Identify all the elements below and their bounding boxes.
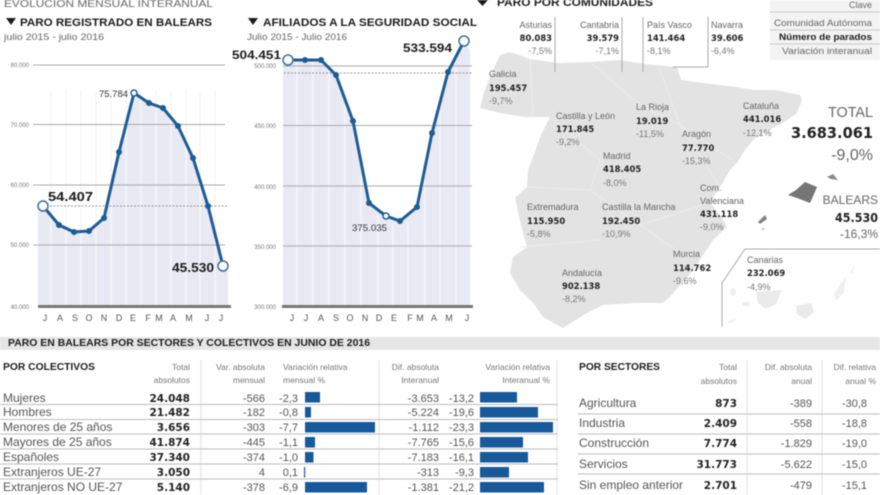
table header: Dif. absoluta bbox=[392, 362, 439, 372]
row: Mujeres: -2,3 bbox=[279, 393, 298, 405]
row: Agricultura: -389 bbox=[790, 398, 812, 410]
row: Construcción: -19,0 bbox=[842, 438, 867, 450]
axis labels bbox=[11, 63, 30, 311]
month labels bbox=[43, 313, 223, 323]
map key bbox=[770, 0, 880, 60]
month labels: M bbox=[185, 313, 193, 323]
region: Madrid: -8,0% bbox=[603, 178, 627, 188]
Baleares total: -16,3% bbox=[840, 227, 878, 241]
axis labels: 300.000 bbox=[254, 305, 277, 311]
region: Castilla la Mancha: Castilla la Mancha bbox=[602, 202, 676, 212]
region: Cantabria: 39.579 bbox=[587, 33, 619, 43]
table header: POR COLECTIVOS bbox=[3, 362, 95, 373]
region: Cataluña bbox=[743, 101, 781, 138]
region: Extremadura: -5,8% bbox=[527, 229, 551, 239]
row: Extranjeros NO UE-27: -21,2 bbox=[449, 482, 474, 494]
table header: Variación relativa bbox=[283, 362, 348, 372]
row: Extranjeros UE-27: -313 bbox=[417, 467, 439, 479]
table header bbox=[579, 362, 876, 386]
heading: afiliados: AFILIADOS A LA SEGURIDAD SOCIAL bbox=[263, 17, 477, 29]
axis labels: 350.000 bbox=[254, 245, 277, 251]
row: Hombres bbox=[3, 405, 538, 419]
row: Mujeres: Mujeres bbox=[3, 391, 46, 405]
subtitle: period: julio 2015 - julio 2016 bbox=[3, 32, 104, 42]
region: Madrid: Madrid bbox=[603, 151, 631, 161]
regional borders bbox=[520, 59, 737, 260]
map key: Número de parados bbox=[779, 32, 872, 42]
row: Servicios: Servicios bbox=[579, 457, 628, 471]
region: Castilla y León: 171.845 bbox=[556, 124, 594, 134]
region: La Rioja: -11,5% bbox=[636, 129, 664, 139]
region: Murcia: Murcia bbox=[673, 249, 700, 259]
map key: Clave bbox=[849, 0, 872, 10]
region: Extremadura bbox=[527, 202, 579, 239]
row: Construcción: Construcción bbox=[579, 436, 649, 450]
region: Asturias bbox=[519, 20, 552, 56]
row: Hombres: -0,8 bbox=[279, 407, 298, 419]
row: Mayores de 25 años: 41.874 bbox=[149, 437, 190, 449]
table header: mensual % bbox=[283, 375, 325, 385]
month labels: M bbox=[155, 313, 163, 323]
region: Comunidad Valenciana: -9,0% bbox=[700, 222, 724, 232]
region: Andalucía: Andalucía bbox=[562, 268, 602, 278]
subtitle: period: Julio 2015 - Julio 2016 bbox=[247, 32, 347, 42]
row: Sin empleo anterior: -15,1 bbox=[842, 480, 867, 492]
value callouts: 375.035 bbox=[352, 223, 387, 234]
region: Madrid bbox=[603, 151, 641, 188]
value callouts: 54.407 bbox=[48, 189, 93, 204]
row: Mayores de 25 años: -445 bbox=[243, 437, 265, 449]
row: Mayores de 25 años: Mayores de 25 años bbox=[3, 435, 112, 449]
axis labels: 500.000 bbox=[254, 64, 277, 70]
region: Aragón bbox=[682, 129, 714, 166]
axis labels: 50.000 bbox=[11, 243, 30, 249]
region: Asturias: 80.083 bbox=[520, 33, 552, 43]
month labels: N bbox=[362, 313, 368, 323]
month labels: J bbox=[290, 313, 294, 323]
region: Cantabria bbox=[580, 20, 619, 56]
region: Murcia bbox=[673, 249, 711, 286]
region: Castilla la Mancha bbox=[602, 202, 676, 239]
table header: absolutos bbox=[154, 375, 190, 385]
map key: Comunidad Autónoma bbox=[774, 18, 872, 28]
panel: paro registrado chart bbox=[3, 17, 231, 323]
region: Aragón: -15,3% bbox=[682, 156, 711, 166]
section heading band: sectores y colectivos: PARO EN BALEARS POR SECTORES Y COLECTIVOS EN JUNIO DE 2016 bbox=[8, 338, 370, 349]
area under line bbox=[38, 93, 228, 306]
month labels: J bbox=[465, 313, 469, 323]
line series bbox=[38, 90, 228, 271]
row: Extranjeros UE-27: -9,3 bbox=[455, 467, 474, 479]
value callouts: 75.784 bbox=[99, 89, 128, 100]
month labels: A bbox=[318, 313, 324, 323]
row: Industria: -558 bbox=[790, 418, 812, 430]
national total: -9,0% bbox=[831, 147, 873, 164]
region: Asturias: Asturias bbox=[519, 20, 552, 30]
region: Comunidad Valenciana: Com. bbox=[700, 183, 722, 193]
month labels: O bbox=[346, 313, 354, 323]
Baleares total bbox=[823, 193, 878, 241]
row: Menores de 25 años: -303 bbox=[243, 422, 265, 434]
table header: Total bbox=[172, 362, 190, 372]
row: Agricultura: -30,8 bbox=[842, 398, 867, 410]
month labels: D bbox=[376, 313, 383, 323]
map of Spain bbox=[480, 52, 802, 328]
row: Extranjeros NO UE-27: -378 bbox=[243, 482, 265, 494]
connector lines bbox=[555, 17, 708, 72]
table header: Var. absoluta bbox=[216, 362, 265, 372]
row: Menores de 25 años bbox=[3, 420, 553, 434]
heading: paro registrado: PARO REGISTRADO EN BALEARS bbox=[20, 17, 212, 29]
Baleares total: 45.530 bbox=[835, 211, 878, 225]
line series bbox=[283, 36, 469, 224]
region: País Vasco: País Vasco bbox=[647, 20, 692, 30]
row: Mujeres: 24.048 bbox=[149, 393, 190, 405]
region: Galicia: Galicia bbox=[489, 69, 517, 79]
month labels: S bbox=[72, 313, 78, 323]
region: Canarias bbox=[747, 255, 785, 292]
row: Sin empleo anterior bbox=[579, 478, 867, 492]
section heading band: sectores y colectivos bbox=[0, 337, 880, 350]
region: País Vasco: -8,1% bbox=[647, 46, 671, 56]
month labels: S bbox=[333, 313, 339, 323]
axis labels: 80.000 bbox=[11, 63, 30, 69]
region: Cataluña: Cataluña bbox=[743, 101, 779, 111]
row: Menores de 25 años: -7,7 bbox=[279, 422, 298, 434]
region: Asturias: -7,5% bbox=[528, 46, 552, 56]
month labels: J bbox=[205, 313, 209, 323]
month labels: M bbox=[445, 313, 453, 323]
region: Murcia: -9,6% bbox=[673, 276, 697, 286]
axis labels: 70.000 bbox=[11, 123, 30, 129]
table header: Total bbox=[719, 362, 737, 372]
row: Españoles: -7.183 bbox=[408, 452, 439, 464]
row: Extranjeros UE-27: 3.050 bbox=[157, 467, 190, 479]
table header: absolutos bbox=[701, 376, 737, 386]
panel: afiliados chart bbox=[232, 17, 477, 323]
month labels: F bbox=[407, 313, 413, 323]
row: Menores de 25 años: -23,3 bbox=[449, 422, 474, 434]
Canary islands bbox=[726, 266, 855, 323]
table header: anual % bbox=[845, 376, 876, 386]
row: Extranjeros UE-27 bbox=[3, 465, 509, 479]
table header: mensual bbox=[233, 375, 265, 385]
region: Andalucía bbox=[562, 268, 602, 304]
row: Industria bbox=[579, 416, 867, 430]
Balearic islands bbox=[758, 174, 838, 230]
table: por colectivos bbox=[0, 360, 558, 495]
row: Servicios: 31.773 bbox=[696, 459, 737, 471]
region: La Rioja bbox=[636, 102, 669, 139]
month labels: J bbox=[43, 313, 47, 323]
Baleares total: BALEARS bbox=[823, 193, 878, 207]
region: Andalucía: -8,2% bbox=[562, 294, 586, 304]
axis labels: 40.000 bbox=[11, 305, 30, 311]
row: Servicios: -15,0 bbox=[842, 459, 867, 471]
table header bbox=[3, 362, 550, 385]
region: Comunidad Valenciana: Valenciana bbox=[700, 196, 744, 206]
month labels: J bbox=[304, 313, 308, 323]
row: Menores de 25 años: -1.112 bbox=[409, 422, 439, 434]
row: Menores de 25 años: Menores de 25 años bbox=[3, 420, 112, 434]
row: Construcción: 7.774 bbox=[704, 438, 737, 450]
area under line bbox=[283, 41, 470, 306]
month labels: A bbox=[170, 313, 176, 323]
row: Mujeres: -13,2 bbox=[449, 393, 474, 405]
region: Aragón: 77.770 bbox=[682, 143, 714, 153]
row: Hombres: -19,6 bbox=[449, 407, 474, 419]
row: Sin empleo anterior: -479 bbox=[790, 480, 812, 492]
row: Españoles: Españoles bbox=[3, 450, 59, 464]
row: Extranjeros NO UE-27: -1.381 bbox=[408, 482, 439, 494]
region: La Rioja: 19.019 bbox=[636, 116, 668, 126]
row: Hombres: -5.224 bbox=[408, 407, 439, 419]
region: Galicia: 195.457 bbox=[489, 83, 527, 93]
row: Españoles bbox=[3, 450, 528, 464]
row: Industria: 2.409 bbox=[704, 418, 737, 430]
row: Hombres: Hombres bbox=[3, 405, 52, 419]
row: Mayores de 25 años: -7.765 bbox=[408, 437, 439, 449]
row: Agricultura: 873 bbox=[715, 398, 737, 410]
table header: Variación relativa bbox=[485, 362, 550, 372]
row: Mayores de 25 años: -15,6 bbox=[449, 437, 474, 449]
month labels: A bbox=[431, 313, 437, 323]
region: Galicia: -9,7% bbox=[489, 96, 513, 106]
month labels: A bbox=[57, 313, 63, 323]
row: Mujeres: -566 bbox=[243, 393, 265, 405]
row: Construcción: -1.829 bbox=[781, 438, 812, 450]
region: Cantabria: Cantabria bbox=[580, 20, 619, 30]
table header: anual bbox=[791, 376, 812, 386]
national total: 3.683.061 bbox=[791, 124, 873, 142]
row: Españoles: -1,0 bbox=[279, 452, 298, 464]
region: Murcia: 114.762 bbox=[673, 263, 711, 273]
region: Extremadura: 115.950 bbox=[527, 216, 565, 226]
region: Canarias: 232.069 bbox=[747, 268, 785, 278]
region: Canarias: Canarias bbox=[747, 255, 784, 265]
national total: TOTAL bbox=[828, 104, 873, 121]
row: Españoles: -16,1 bbox=[449, 452, 474, 464]
row: Hombres: -182 bbox=[243, 407, 265, 419]
row: Españoles: 37.340 bbox=[149, 452, 190, 464]
row: Industria: -18,8 bbox=[842, 418, 867, 430]
table header: Interanual % bbox=[502, 375, 550, 385]
region: Navarra: -6,4% bbox=[711, 46, 735, 56]
row: Extranjeros NO UE-27: Extranjeros NO UE-27 bbox=[3, 480, 123, 494]
region: Comunidad Valenciana bbox=[700, 183, 744, 232]
region: La Rioja: La Rioja bbox=[636, 102, 669, 112]
row: Servicios bbox=[579, 457, 867, 471]
region: Madrid: 418.405 bbox=[603, 164, 641, 174]
region: Castilla y León: -9,2% bbox=[556, 137, 580, 147]
row: Sin empleo anterior: Sin empleo anterior bbox=[579, 478, 683, 492]
region: Extremadura: Extremadura bbox=[527, 202, 579, 212]
row: Extranjeros NO UE-27: 5.140 bbox=[157, 482, 190, 494]
table header: Interanual bbox=[401, 375, 439, 385]
month labels: D bbox=[116, 313, 123, 323]
month labels: E bbox=[391, 313, 397, 323]
row: Mayores de 25 años: -1,1 bbox=[279, 437, 298, 449]
region: Cataluña: 441.016 bbox=[743, 114, 781, 124]
table header: POR SECTORES bbox=[579, 362, 660, 373]
month labels bbox=[290, 313, 469, 323]
national total bbox=[791, 104, 873, 164]
table header: Dif. relativa bbox=[833, 362, 876, 372]
region: Castilla y León bbox=[556, 111, 615, 147]
row: Extranjeros NO UE-27: -6,9 bbox=[279, 482, 298, 494]
row: Mujeres bbox=[3, 391, 517, 405]
region: Navarra: Navarra bbox=[711, 20, 743, 30]
row: Españoles: -374 bbox=[243, 452, 265, 464]
table header: Dif. absoluta bbox=[765, 362, 812, 372]
region: Castilla y León: Castilla y León bbox=[556, 111, 615, 121]
month labels: O bbox=[85, 313, 93, 323]
region: Navarra: 39.606 bbox=[711, 33, 743, 43]
row: Agricultura: Agricultura bbox=[579, 396, 637, 410]
month labels: M bbox=[416, 313, 424, 323]
axis labels: 400.000 bbox=[254, 185, 277, 191]
region: Comunidad Valenciana: 431.118 bbox=[700, 209, 738, 219]
value callouts bbox=[232, 41, 452, 234]
row: Servicios: -5.622 bbox=[781, 459, 812, 471]
month labels: J bbox=[219, 313, 223, 323]
region: País Vasco: 141.464 bbox=[647, 33, 685, 43]
row: Extranjeros UE-27: 4 bbox=[259, 467, 265, 479]
region: Cataluña: -12,1% bbox=[743, 128, 772, 138]
table: por sectores bbox=[578, 360, 880, 495]
region: Galicia bbox=[489, 69, 527, 106]
region: País Vasco bbox=[647, 20, 692, 56]
panel: paro por comunidades map bbox=[477, 0, 880, 328]
region: Canarias: -4,9% bbox=[747, 282, 771, 292]
row: Extranjeros UE-27: 0,1 bbox=[283, 467, 298, 479]
region: Navarra bbox=[711, 20, 743, 56]
row: Menores de 25 años: 3.656 bbox=[157, 422, 190, 434]
region: Castilla la Mancha: 192.450 bbox=[602, 216, 640, 226]
row: Extranjeros UE-27: Extranjeros UE-27 bbox=[3, 465, 101, 479]
axis labels: 450.000 bbox=[254, 124, 277, 130]
row: Sin empleo anterior: 2.701 bbox=[704, 480, 737, 492]
value callouts: 504.451 bbox=[232, 48, 281, 62]
row: Agricultura bbox=[579, 396, 867, 410]
value callouts: 533.594 bbox=[403, 41, 452, 55]
row: Extranjeros NO UE-27 bbox=[3, 480, 544, 494]
region: Aragón: Aragón bbox=[682, 129, 711, 139]
region: Castilla la Mancha: -10,9% bbox=[602, 229, 631, 239]
Canarias inset frame bbox=[722, 249, 880, 327]
month labels: F bbox=[145, 313, 151, 323]
region: Andalucía: 902.138 bbox=[562, 281, 600, 291]
axis labels: 60.000 bbox=[11, 183, 30, 189]
value callouts bbox=[48, 89, 214, 275]
month labels: N bbox=[101, 313, 107, 323]
row: Hombres: 21.482 bbox=[149, 407, 190, 419]
value callouts: 45.530 bbox=[172, 260, 214, 275]
row: Industria: Industria bbox=[579, 416, 625, 430]
row: Construcción bbox=[579, 436, 867, 450]
row: Mayores de 25 años bbox=[3, 435, 523, 449]
axis labels bbox=[254, 64, 277, 311]
row: Mujeres: -3.653 bbox=[408, 393, 439, 405]
month labels: E bbox=[130, 313, 136, 323]
map key: Variación interanual bbox=[782, 46, 872, 56]
region: Cantabria: -7,1% bbox=[595, 46, 619, 56]
